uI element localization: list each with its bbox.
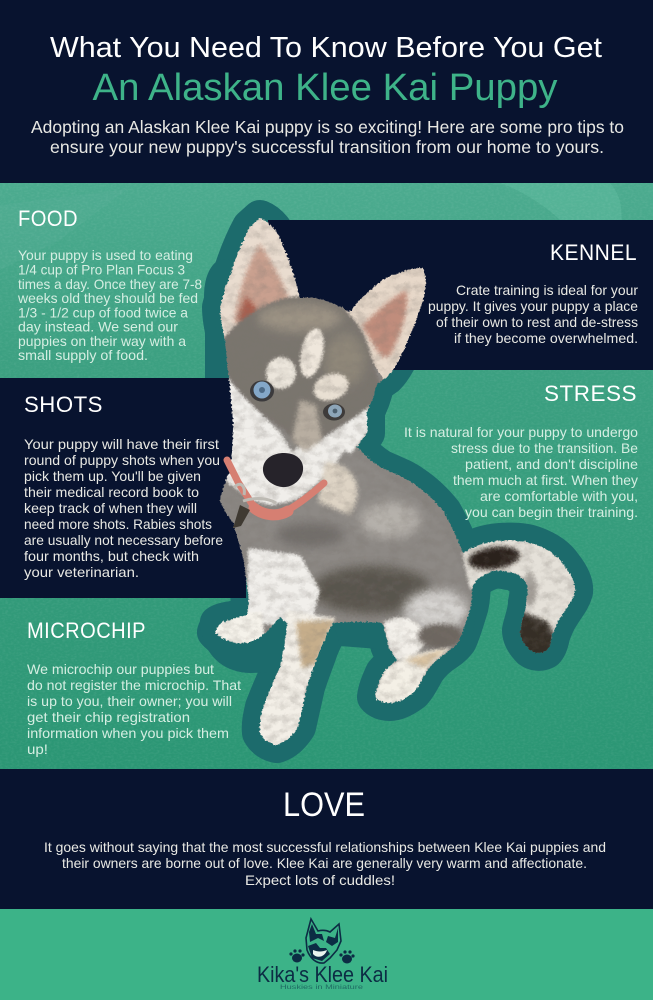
text: shots: need more shots. Rabies shots [24, 516, 212, 532]
panel: kennel background [268, 220, 653, 370]
section: stress [404, 381, 638, 520]
text: microchip: is up to you, their owner; you will [27, 693, 232, 709]
text: kennel: if they become overwhelmed. [454, 330, 638, 346]
logo tagline: Huskies in Miniature [280, 985, 364, 991]
panel: shots background [0, 378, 246, 598]
section: food [17, 206, 202, 363]
text: kennel: puppy. It gives your puppy a place [428, 298, 638, 314]
text: food: 1/3 - 1/2 cup of food twice a [18, 304, 188, 320]
text: shots: are usually not necessary before [24, 532, 223, 548]
heading: shots: SHOTS [24, 392, 103, 417]
text: food: day instead. We send our [18, 319, 178, 335]
text: stress: them much at first. When they [453, 472, 638, 488]
text: kennel [428, 282, 638, 346]
intro text [31, 117, 624, 157]
intro text: ensure your new puppy's successful transition from our home to yours. [50, 137, 604, 157]
text: microchip: do not register the microchip. That [27, 677, 241, 693]
text: microchip: We microchip our puppies but [27, 661, 214, 677]
text: stress: you can begin their training. [465, 504, 638, 520]
dog nose [263, 453, 303, 487]
section: kennel [428, 240, 638, 346]
heading: microchip: MICROCHIP [27, 618, 146, 643]
text: shots: round of puppy shots when you [24, 452, 220, 468]
heading: food: FOOD [18, 206, 78, 231]
text: food: Your puppy is used to eating [18, 247, 193, 263]
text: love: It goes without saying that the most successful relationships between Klee Kai puppies and [44, 839, 606, 855]
text: microchip: up! [27, 741, 48, 757]
text: shots: Your puppy will have their first [24, 436, 219, 452]
text: stress [404, 424, 638, 520]
text: food: weeks old they should be fed [17, 290, 198, 306]
text: shots: keep track of when they will [24, 500, 197, 516]
icon: left paw [289, 949, 305, 962]
text: stress: patient, and don't discipline [465, 456, 638, 472]
title line 1: What You Need To Know Before You Get [50, 32, 602, 64]
text: stress: are comfortable with you, [480, 488, 638, 504]
dog tail [462, 536, 580, 660]
text: food: small supply of food. [18, 347, 148, 363]
text: food [17, 247, 202, 363]
text: shots: your veterinarian. [24, 564, 139, 580]
text: shots: four months, but check with [24, 548, 199, 564]
dog ears [215, 215, 430, 385]
text: microchip: information when you pick them [27, 725, 229, 741]
dog body [240, 450, 468, 633]
text: food: 1/4 cup of Pro Plan Focus 3 [18, 262, 185, 278]
text: microchip: get their chip registration [27, 709, 190, 725]
heading: kennel: KENNEL [550, 240, 637, 265]
text: microchip [27, 661, 241, 757]
heading: stress: STRESS [544, 381, 637, 406]
logo name: Kika's Klee Kai [257, 962, 388, 987]
section: shots [24, 392, 223, 580]
intro text: Adopting an Alaskan Klee Kai puppy is so exciting! Here are some pro tips to [31, 117, 624, 137]
text: food: times a day. Once they are 7-8 [18, 276, 202, 292]
text: kennel: Crate training is ideal for your [456, 282, 638, 298]
fur mottling [215, 218, 576, 745]
text: love: Expect lots of cuddles! [245, 872, 395, 888]
heading: love: LOVE [283, 786, 365, 824]
text: stress: It is natural for your puppy to undergo [404, 424, 638, 440]
section: microchip [27, 618, 241, 757]
text: love: their owners are borne out of love. Klee Kai are generally very warm and affectionate. [62, 855, 587, 871]
text: shots [24, 436, 223, 580]
text: shots: pick them up. You'll be given [24, 468, 201, 484]
header panel [31, 32, 624, 157]
dog legs and paws [208, 610, 462, 752]
icon: right paw [339, 950, 355, 964]
dog collar [227, 460, 324, 528]
text: shots: their medical record book to [24, 484, 199, 500]
dog photo illustration [214, 218, 576, 746]
text: love [44, 839, 606, 888]
dog halo outline [200, 218, 575, 745]
text: kennel: of their own to rest and de-stress [436, 314, 638, 330]
icon: husky head [306, 919, 341, 963]
panel: footer background [0, 909, 653, 1000]
dog eyes [250, 380, 345, 420]
green grass background [0, 183, 653, 769]
text: food: puppies on their way with a [18, 333, 186, 349]
logo: Kika's Klee Kai [257, 919, 388, 991]
title line 2: An Alaskan Klee Kai Puppy [92, 67, 558, 109]
dog head [218, 296, 380, 505]
dog fur [214, 218, 576, 746]
section: love [44, 786, 606, 888]
text: stress: stress due to the transition. Be [451, 440, 638, 456]
panel: love background [0, 769, 653, 909]
